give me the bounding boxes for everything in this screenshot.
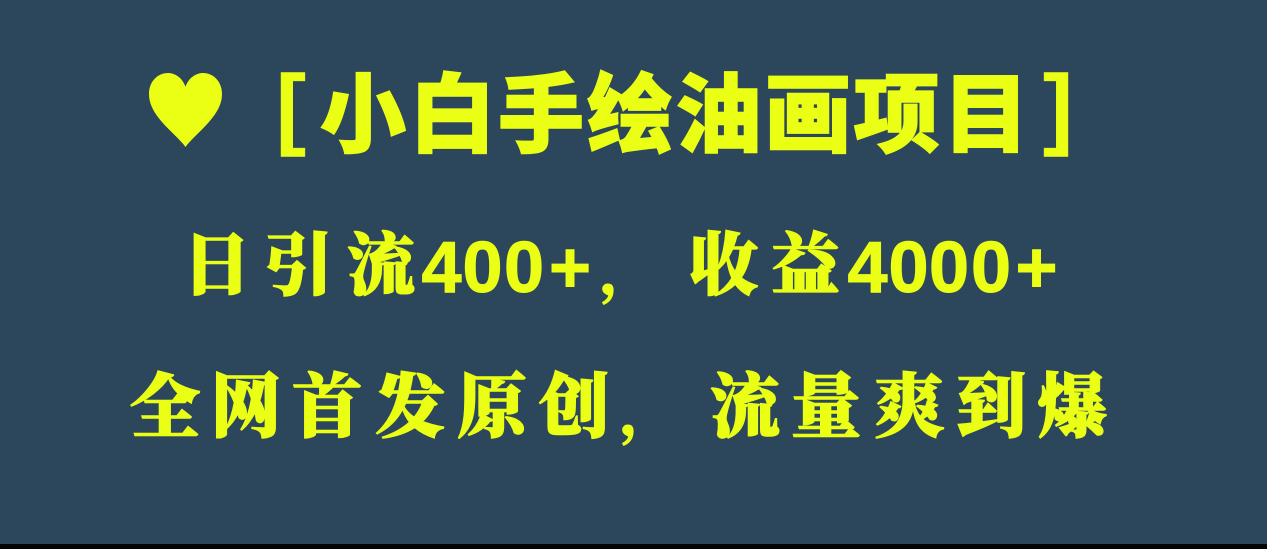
subtitle line 1: 收 — [690, 212, 758, 309]
subtitle line 1: 引 — [265, 212, 333, 309]
subtitle line 1: 4 — [847, 228, 888, 308]
subtitle line 1: 0 — [462, 228, 503, 308]
subtitle line 1: 4 — [421, 228, 462, 308]
subtitle line 1: 日 — [182, 212, 250, 309]
subtitle line 2 — [130, 351, 1107, 452]
subtitle line 2: 发 — [375, 351, 445, 452]
subtitle line 1: 0 — [971, 228, 1011, 308]
subtitle line 1: 0 — [929, 228, 969, 308]
subtitle line 1: + — [549, 228, 591, 308]
title: 手 — [498, 45, 584, 170]
subtitle line 2: ， — [621, 376, 671, 448]
title: 绘 — [587, 45, 673, 170]
title: [ — [276, 58, 306, 158]
subtitle line 2: 爆 — [1037, 351, 1107, 452]
title: 项 — [854, 45, 940, 170]
subtitle line 2: 量 — [791, 351, 861, 452]
icon: heart — [149, 73, 222, 147]
subtitle line 1: 0 — [888, 228, 929, 308]
title: 油 — [676, 45, 762, 170]
subtitle line 2: 首 — [292, 351, 362, 452]
subtitle line 2: 到 — [956, 351, 1026, 452]
title: 白 — [410, 45, 496, 170]
subtitle line 2: 全 — [130, 351, 200, 452]
title: 目 — [943, 45, 1029, 170]
subtitle line 1: ， — [601, 235, 651, 307]
subtitle line 1: 流 — [347, 212, 415, 309]
title: 画 — [765, 45, 851, 170]
bottom black bar — [0, 544, 1267, 549]
subtitle line 1: 0 — [504, 228, 544, 308]
title: ] — [1043, 58, 1073, 158]
subtitle line 2: 流 — [710, 351, 780, 452]
subtitle line 1: + — [1015, 228, 1058, 308]
subtitle line 2: 创 — [539, 351, 609, 452]
title: 小 — [320, 45, 406, 170]
title — [276, 45, 1073, 170]
subtitle line 2: 爽 — [874, 351, 944, 452]
subtitle line 2: 网 — [211, 351, 281, 452]
subtitle line 2: 原 — [457, 351, 527, 452]
subtitle line 1: 益 — [771, 212, 840, 309]
subtitle line 1 — [182, 212, 1058, 309]
